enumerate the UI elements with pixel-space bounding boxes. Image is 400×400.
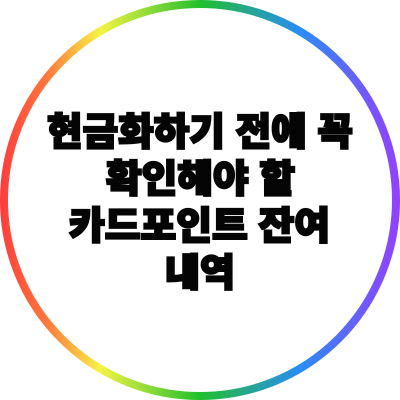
title: 카드포인트 잔여 — [69, 206, 330, 248]
title: 현금화하기 전에 꼭 — [47, 112, 353, 154]
title — [47, 112, 353, 295]
title: 내역 — [165, 253, 235, 295]
title: 확인해야 할 — [106, 159, 295, 201]
